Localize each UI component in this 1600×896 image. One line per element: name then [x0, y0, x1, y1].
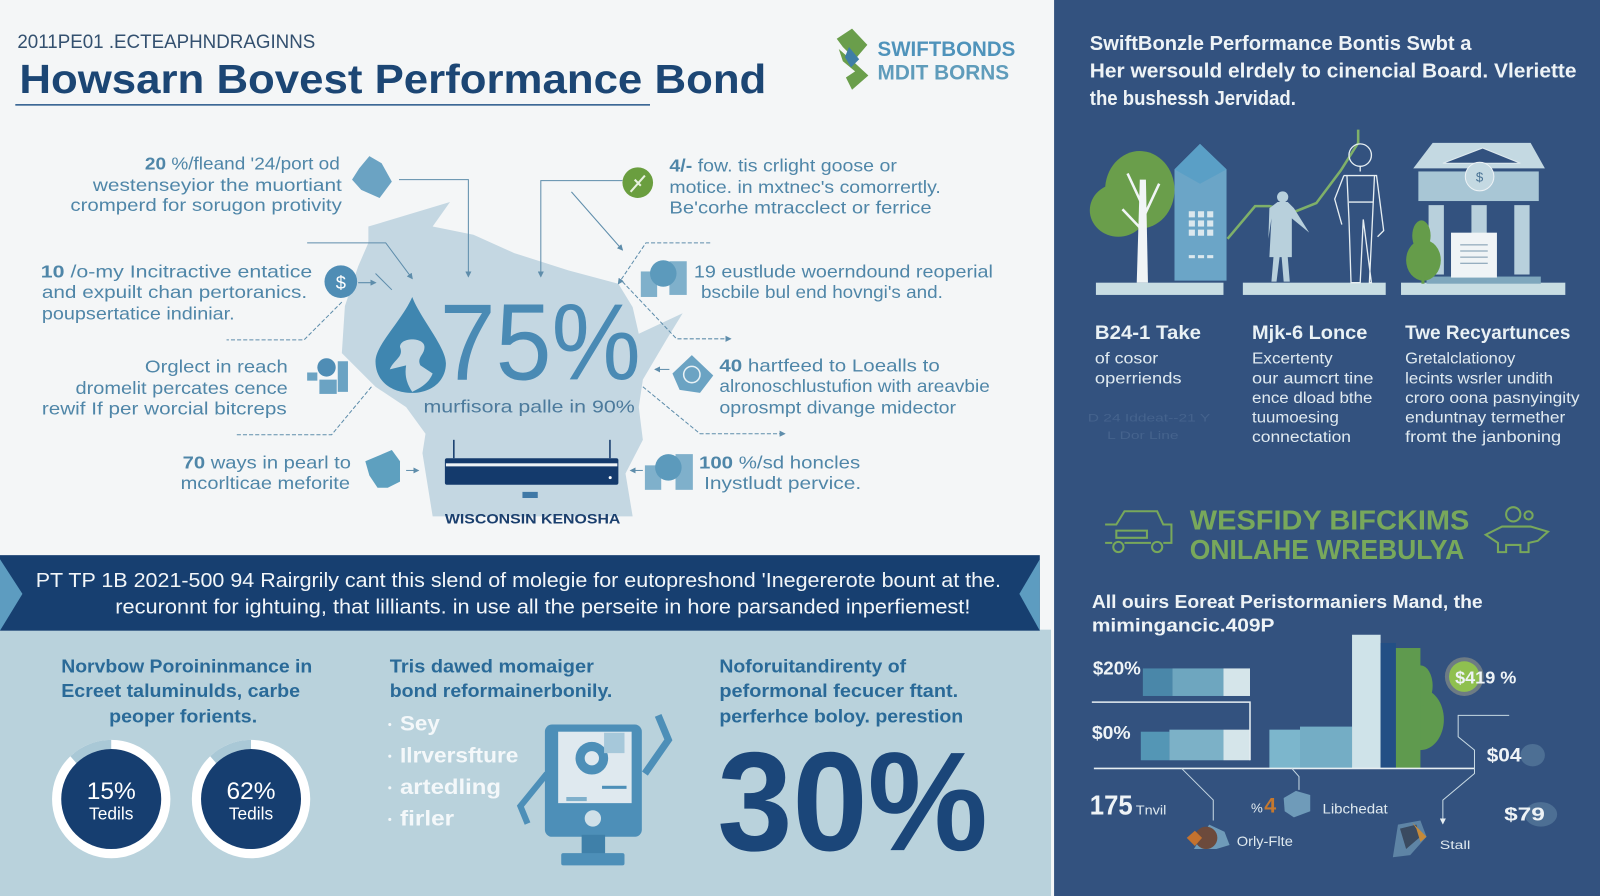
- title: Howsarn Bovest Performance Bond: [19, 56, 766, 102]
- bullets: Ilrversfture: [400, 743, 518, 767]
- donut 15%: Tedils: [89, 803, 134, 823]
- bullets: [388, 712, 518, 831]
- callout: middle right: alronoschlustufion with areavbie: [719, 376, 990, 396]
- donut 15%: [52, 740, 170, 858]
- panel: bullet list: [388, 656, 668, 865]
- donut 62%: 62%: [227, 778, 276, 805]
- icon: router device: [445, 440, 618, 498]
- chart lines: [1092, 702, 1474, 768]
- value: 175 Tnvil: Tnvil: [1136, 802, 1166, 817]
- callout: upper right: [694, 262, 993, 302]
- icon: monitor character: [520, 715, 668, 865]
- heading: bond reformainerbonily.: [390, 680, 612, 701]
- column bars: [1269, 635, 1444, 768]
- callout: lower left: mcorlticae meforite: [181, 473, 350, 493]
- heading: [61, 656, 312, 727]
- bullets: artedling: [400, 775, 501, 799]
- column: Mjk-6 Lonce: Mjk-6 Lonce: [1252, 322, 1368, 344]
- callout: lower right: Inystludt pervice.: [704, 473, 861, 493]
- bullets: firler: [400, 807, 454, 831]
- column: Mjk-6 Lonce: [1252, 322, 1374, 446]
- value: $79: [1504, 802, 1557, 827]
- big number: 75%: [440, 282, 641, 403]
- icon: droplet: [376, 297, 446, 393]
- column: Mjk-6 Lonce: tuumoesing: [1252, 409, 1339, 426]
- green section heading: WESFIDY BIFCKIMS: [1190, 505, 1469, 536]
- callout: top left: cromperd for sorugon protivity: [70, 195, 342, 215]
- callout: upper left: [41, 262, 312, 323]
- column: B24-1 Take: L Dor Line: [1107, 430, 1179, 442]
- right intro text: [1090, 33, 1577, 110]
- callout: $419 %: [1445, 657, 1516, 696]
- column: Mjk-6 Lonce: our aumcrt tine: [1252, 371, 1374, 388]
- icon: green leaf: [622, 167, 653, 198]
- callout: upper left: and expuilt chan pertoranics.: [42, 282, 307, 302]
- icon: people tile lower: [645, 454, 693, 490]
- column: Mjk-6 Lonce: ence dload bthe: [1252, 390, 1373, 407]
- callout: upper left: 10 /o-my Incitractive entatice: [41, 262, 312, 282]
- callout: middle right: oprosmpt divange midector: [719, 397, 956, 417]
- column: B24-1 Take: [1088, 322, 1211, 442]
- column: B24-1 Take: of cosor: [1095, 350, 1158, 367]
- column: Twe Recyartunces: fromt the janboning: [1405, 429, 1561, 446]
- value: 4 Libchedat: Libchedat: [1322, 801, 1388, 817]
- icon: people tile: [641, 260, 687, 297]
- callout: upper right: 19 eustlude woerndound reoperial: [694, 262, 993, 282]
- panel: big stat: [717, 656, 988, 880]
- column: Mjk-6 Lonce: connectation: [1252, 429, 1351, 446]
- callout: middle left: Orglect in reach: [145, 356, 288, 376]
- illustration: tree and building: [1090, 144, 1227, 295]
- row one bars: [1143, 668, 1250, 696]
- green section heading: ONILAHE WREBULYA: [1190, 534, 1464, 565]
- callout: lower right: 100 %/sd honcles: [699, 452, 860, 472]
- green section heading: [1105, 505, 1548, 565]
- callout: top left: [70, 153, 342, 215]
- right intro text: Her wersould elrdely to cinencial Board. Vleriette: [1090, 61, 1577, 83]
- illustration: bank: [1401, 143, 1565, 295]
- heading: Norvbow Poroininmance in: [61, 656, 312, 677]
- column: Twe Recyartunces: croro oona pasnyingity: [1405, 390, 1580, 407]
- value: 175 Tnvil: 175: [1090, 789, 1133, 820]
- callout: top right: 4/- fow. tis crlight goose or: [669, 155, 897, 175]
- value: Orly-Flte: Orly-Flte: [1237, 834, 1293, 850]
- banner text: [36, 570, 1001, 618]
- chart title: All ouirs Eoreat Peristormaniers Mand, the: [1092, 591, 1483, 612]
- icon: dollar coin: [324, 265, 357, 298]
- column: Twe Recyartunces: [1405, 322, 1580, 446]
- callout: $419 %: $419 %: [1455, 668, 1516, 688]
- donut 15%: 15%: [87, 778, 136, 805]
- icon: chart: [307, 358, 348, 394]
- column: B24-1 Take: operriends: [1095, 371, 1182, 388]
- column: Twe Recyartunces: enduntnay termether: [1405, 409, 1565, 426]
- heading: Noforuitandirenty of: [719, 656, 907, 677]
- banner left chevron: [0, 559, 22, 631]
- callout: top right: motice. in mxtnec's comorrertly.: [669, 177, 941, 197]
- callout: upper left: poupsertatice indiniar.: [42, 303, 235, 323]
- bar chart: $0%: [1092, 722, 1131, 743]
- donut 62%: [192, 740, 310, 858]
- row labels: $20%: [1093, 658, 1141, 679]
- logo: MDIT BORNS: [878, 61, 1009, 85]
- bar chart: [1090, 635, 1557, 857]
- value: 4 Libchedat: %: [1251, 800, 1263, 815]
- big number 30%: 30%: [717, 723, 988, 880]
- banner text: recuronnt for ightuing, that lilliants. in use all the perseite in hore parsanded inperfiemest!: [115, 596, 970, 618]
- column: Twe Recyartunces: Gretalclationoy: [1405, 350, 1515, 367]
- right intro text: SwiftBonzle Performance Bontis Swbt a: [1090, 33, 1472, 55]
- value: $79: $79: [1504, 803, 1545, 824]
- icon: globe tile: [672, 355, 713, 393]
- panel: lower stats background: [0, 630, 1051, 896]
- icon: hand: [365, 450, 400, 488]
- banner right chevron: [1019, 559, 1040, 631]
- row two bars: [1141, 730, 1250, 760]
- value: Orly-Flte: [1187, 825, 1293, 850]
- heading: peoper forients.: [109, 706, 257, 727]
- callout: middle right: 40 hartfeed to Loealls to: [719, 355, 940, 375]
- heading: [390, 656, 612, 701]
- value: 175 Tnvil: [1090, 789, 1166, 820]
- callout: top left: westenseyior the muortiant: [92, 175, 342, 195]
- person outline: [1335, 144, 1384, 283]
- callout: middle left: dromelit percates cence: [76, 378, 288, 398]
- value: 4 Libchedat: [1251, 791, 1388, 817]
- central stat: 75%: [376, 282, 641, 416]
- icon: top left blob: [352, 156, 392, 198]
- caption: murfisora palle in 90%: [423, 396, 635, 416]
- chart title: mimingancic.409P: [1092, 615, 1274, 636]
- icon: dollar coin: $: [336, 272, 346, 293]
- value: Stall: [1393, 820, 1470, 857]
- illustration: bank: $: [1476, 170, 1484, 185]
- banner: [0, 555, 1040, 631]
- panel: right column: [1054, 0, 1600, 896]
- column: Twe Recyartunces: lecints wsrler undith: [1405, 371, 1553, 388]
- heading: Tris dawed momaiger: [390, 656, 595, 677]
- illustration: growth line and people: [1228, 130, 1386, 295]
- heading: [719, 656, 963, 727]
- column: Mjk-6 Lonce: Excertenty: [1252, 350, 1333, 367]
- panel: main header: [15, 31, 766, 106]
- header kicker: 2011PE01 .ECTEAPHNDRAGINNS: [17, 31, 315, 53]
- logo: [837, 29, 1015, 90]
- callout: top right: Be'corhe mtracclect or ferrice: [669, 197, 932, 217]
- callout: middle left: rewif If per worcial bitcreps: [42, 398, 287, 418]
- title underline: [15, 104, 650, 106]
- callout: lower left: [181, 452, 351, 493]
- value: $04: [1487, 744, 1545, 766]
- callout: lower right: [699, 452, 861, 493]
- logo text: SWIFTBONDS: [878, 37, 1015, 61]
- icon: animal outline: [1486, 507, 1548, 552]
- value: 4 Libchedat: 4: [1264, 793, 1276, 817]
- connector lines: [1182, 715, 1509, 824]
- map of Wisconsin: [342, 202, 683, 516]
- person solid: [1268, 202, 1309, 282]
- callout: middle left: [42, 356, 288, 418]
- column: Twe Recyartunces: Twe Recyartunces: [1405, 322, 1570, 344]
- value: $04: $04: [1487, 744, 1522, 766]
- right intro text: the bushessh Jervidad.: [1090, 88, 1296, 110]
- column: B24-1 Take: B24-1 Take: [1095, 322, 1201, 344]
- connector lines: [227, 180, 785, 470]
- callout: top right: [669, 155, 941, 217]
- callout: upper right: bscbile bul end hovngi's and.: [701, 282, 943, 302]
- map label: WISCONSIN KENOSHA: [445, 512, 620, 528]
- icon: logo mark: [837, 29, 868, 90]
- heading: Ecreet taluminulds, carbe: [61, 680, 300, 701]
- icon: truck outline: [1105, 511, 1171, 552]
- heading: peformonal fecucer ftant.: [719, 680, 958, 701]
- callout: lower left: 70 ways in pearl to: [183, 452, 351, 472]
- chart title: [1092, 591, 1483, 636]
- callout: middle right: [719, 355, 990, 417]
- callout: top left: 20 %/fleand '24/port od: [145, 153, 340, 173]
- heading: perferhce boloy. perestion: [719, 706, 963, 727]
- bullets: Sey: [400, 712, 440, 736]
- banner text: PT TP 1B 2021-500 94 Rairgrily cant this slend of molegie for eutopreshond 'Inegererote bount at the.: [36, 570, 1001, 592]
- column: B24-1 Take: D 24 Iddeat--21 Y: [1088, 412, 1211, 424]
- value: Stall: Stall: [1440, 838, 1470, 852]
- panel: donut stats: [52, 656, 312, 858]
- donut 62%: Tedils: [229, 803, 273, 823]
